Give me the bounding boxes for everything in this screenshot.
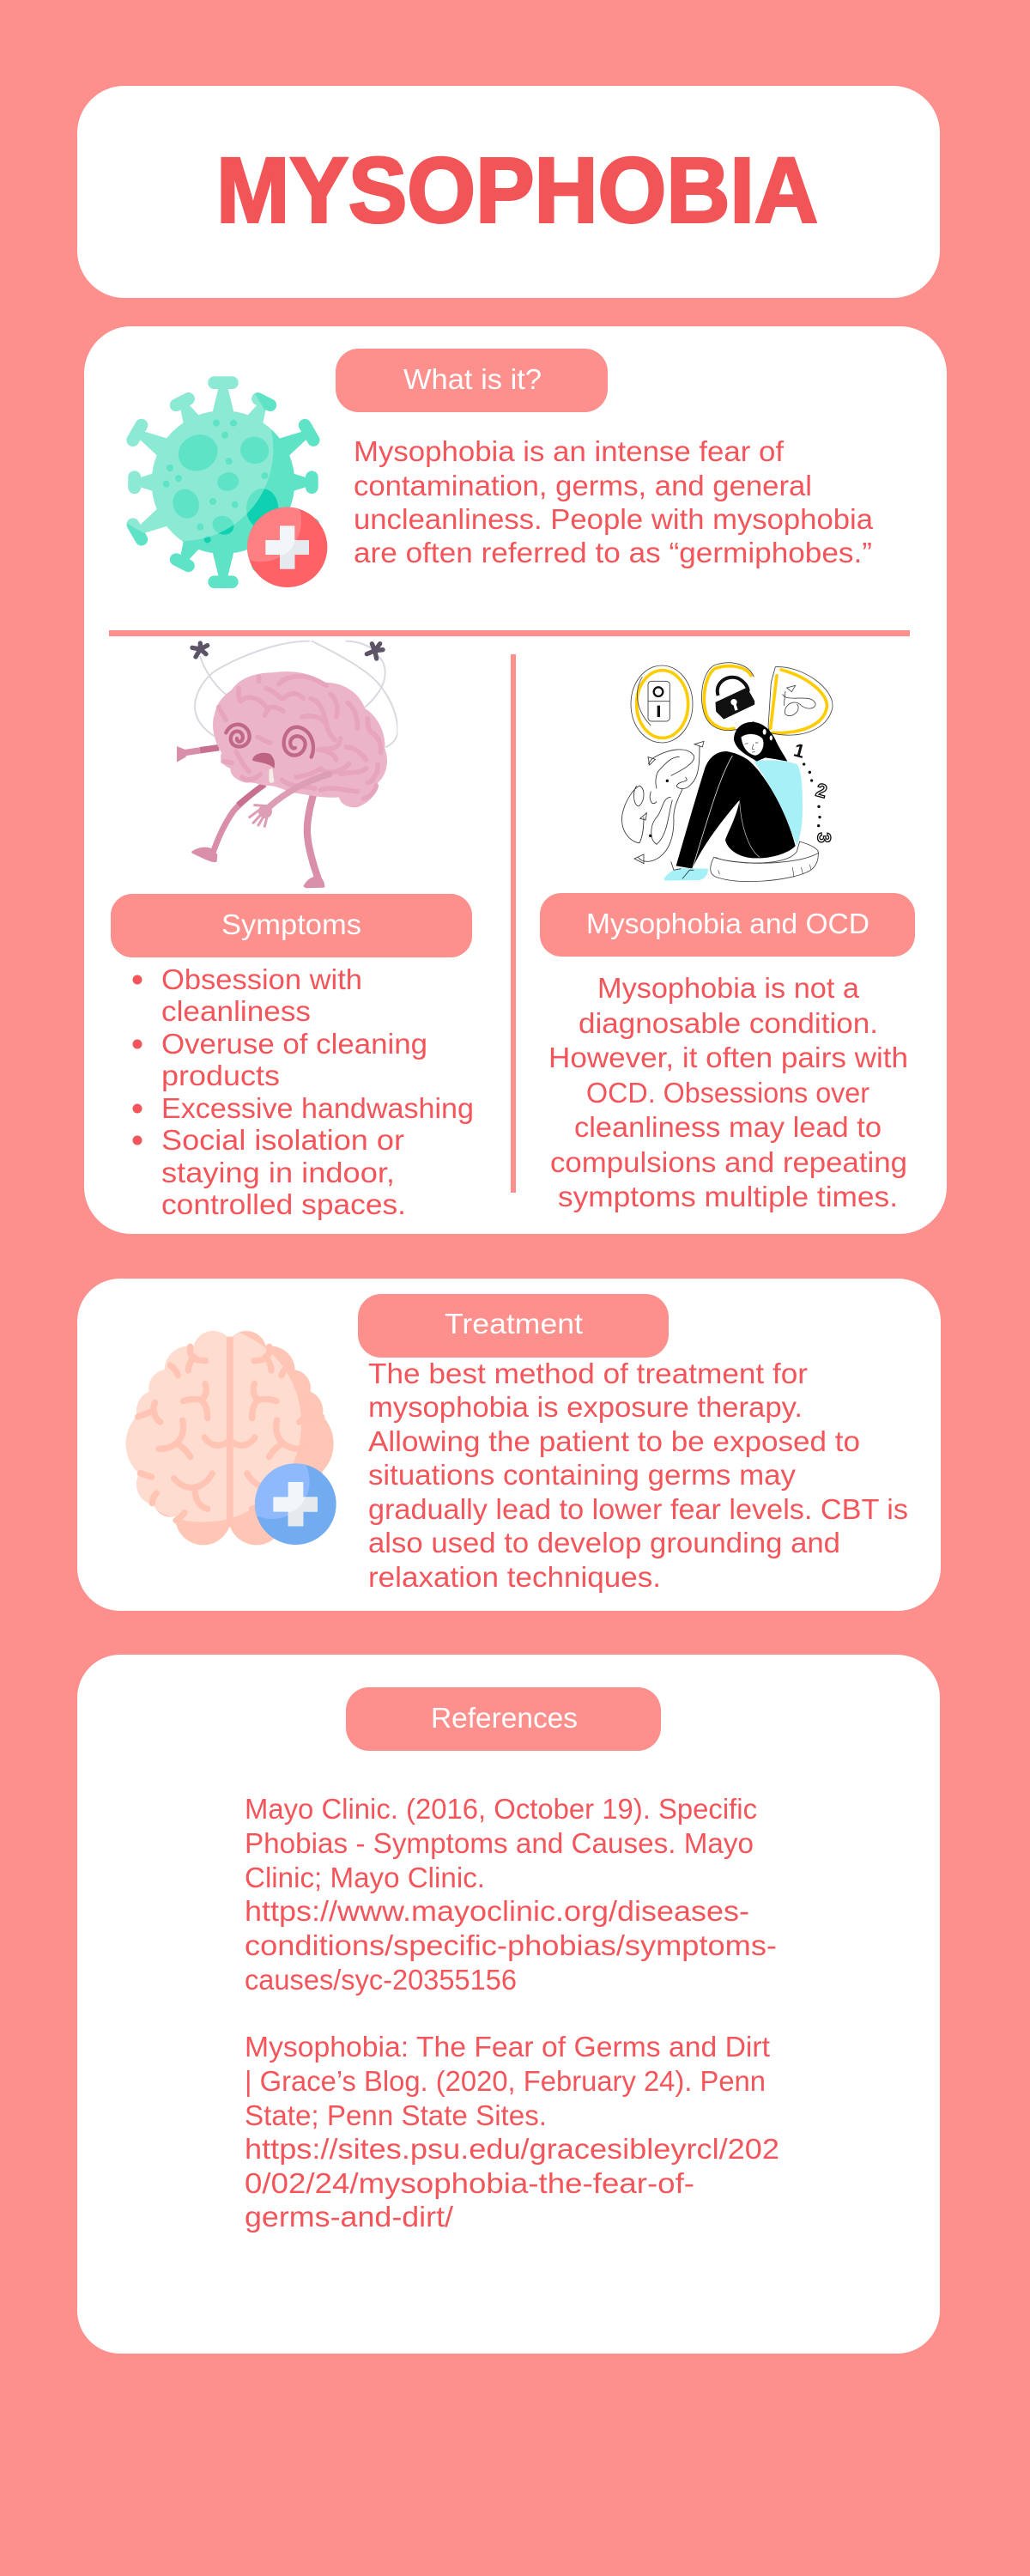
text block: definition: contamination, germs, and general xyxy=(354,470,812,501)
text block: Mayo Clinic reference xyxy=(245,1793,777,1996)
icon: woman sitting below the letters OCD: 1 xyxy=(791,739,807,762)
heading pill: mysophobia and OCD xyxy=(540,893,915,957)
heading pill: symptoms xyxy=(111,894,472,957)
list: symptoms: products xyxy=(161,1060,280,1091)
text block: definition: Mysophobia is an intense fear of xyxy=(354,435,785,467)
text block: Grace's Blog reference: State; Penn State Sites. xyxy=(245,2099,547,2131)
icon: peach brain with blue cross badge xyxy=(126,1331,336,1545)
list: symptoms: Excessive handwashing xyxy=(161,1092,474,1124)
icon: dizzy pink brain character xyxy=(177,641,397,888)
text block: mysophobia and OCD: compulsions and repeating xyxy=(550,1146,907,1178)
text block: Grace's Blog reference xyxy=(245,2031,779,2233)
icon: green virus with red cross badge xyxy=(124,376,327,588)
text block: Mayo Clinic reference: conditions/specific-phobias/symptoms- xyxy=(245,1929,777,1961)
text block: definition xyxy=(354,435,874,568)
text block: definition: are often referred to as “germiphobes.” xyxy=(354,537,872,568)
text block: mysophobia and OCD: diagnosable condition. xyxy=(579,1007,878,1039)
heading pill: what is it: What is it? xyxy=(403,363,542,395)
text block: Mayo Clinic reference: https://www.mayoclinic.org/diseases- xyxy=(245,1895,749,1927)
text block: mysophobia and OCD: Mysophobia is not a xyxy=(597,972,860,1004)
text block: Mayo Clinic reference: Clinic; Mayo Clinic. xyxy=(245,1862,485,1893)
text block: treatment: situations containing germs may xyxy=(368,1459,797,1491)
text block: mysophobia and OCD xyxy=(548,972,908,1212)
list: symptoms: staying in indoor, xyxy=(161,1157,395,1188)
text block: definition: uncleanliness. People with mysophobia xyxy=(354,503,874,535)
text block: Mayo Clinic reference: causes/syc-20355156 xyxy=(245,1964,517,1996)
heading pill: what is it xyxy=(336,349,608,412)
text block: mysophobia and OCD: cleanliness may lead to xyxy=(574,1111,882,1143)
list: symptoms: controlled spaces. xyxy=(161,1188,406,1220)
text block: Grace's Blog reference: germs-and-dirt/ xyxy=(245,2201,454,2233)
list: symptoms xyxy=(132,963,474,1220)
heading pill: references: References xyxy=(431,1702,578,1734)
text block: treatment: also used to develop grounding and xyxy=(368,1527,840,1558)
list: symptoms: Overuse of cleaning xyxy=(161,1028,427,1060)
text block: treatment xyxy=(368,1358,908,1593)
text block: Grace's Blog reference: 0/02/24/mysophobia-the-fear-of- xyxy=(245,2167,694,2199)
text block: treatment: Allowing the patient to be exposed to xyxy=(368,1425,860,1457)
text block: Grace's Blog reference: Mysophobia: The Fear of Germs and Dirt xyxy=(245,2031,770,2063)
panel: references xyxy=(77,1655,940,2354)
list: symptoms: cleanliness xyxy=(161,995,311,1027)
heading pill: treatment: Treatment xyxy=(445,1308,583,1340)
text block: Grace's Blog reference: https://sites.psu.edu/gracesibleyrcl/202 xyxy=(245,2133,779,2165)
heading pill: references xyxy=(346,1687,661,1751)
panel: definition, symptoms and OCD xyxy=(84,326,947,1234)
icon: woman sitting below the letters OCD: 3 xyxy=(813,832,834,843)
text block: Mayo Clinic reference: Mayo Clinic. (2016, October 19). Specific xyxy=(245,1793,757,1825)
text block: mysophobia and OCD: However, it often pairs with xyxy=(548,1042,908,1073)
title: MYSOPHOBIA xyxy=(216,137,818,242)
text block: Mayo Clinic reference: Phobias - Symptoms and Causes. Mayo xyxy=(245,1827,754,1859)
panel: treatment xyxy=(77,1279,941,1611)
text block: Grace's Blog reference: | Grace’s Blog. (2020, February 24). Penn xyxy=(245,2065,766,2097)
heading pill: mysophobia and OCD: Mysophobia and OCD xyxy=(586,908,869,939)
text block: treatment: gradually lead to lower fear levels. CBT is xyxy=(368,1493,908,1525)
list: symptoms: Obsession with xyxy=(161,963,362,995)
text block: mysophobia and OCD: OCD. Obsessions over xyxy=(586,1077,869,1109)
heading pill: treatment xyxy=(358,1294,669,1358)
icon: woman sitting below the letters OCD xyxy=(622,663,834,882)
text block: mysophobia and OCD: symptoms multiple times. xyxy=(558,1181,898,1212)
text block: treatment: relaxation techniques. xyxy=(368,1561,661,1593)
icon: woman sitting below the letters OCD: 2 xyxy=(814,779,829,802)
panel: title xyxy=(77,86,940,298)
text block: treatment: The best method of treatment for xyxy=(368,1358,808,1389)
text block: treatment: mysophobia is exposure therapy. xyxy=(368,1391,803,1423)
list: symptoms: Social isolation or xyxy=(161,1124,404,1156)
heading pill: symptoms: Symptoms xyxy=(221,908,361,940)
